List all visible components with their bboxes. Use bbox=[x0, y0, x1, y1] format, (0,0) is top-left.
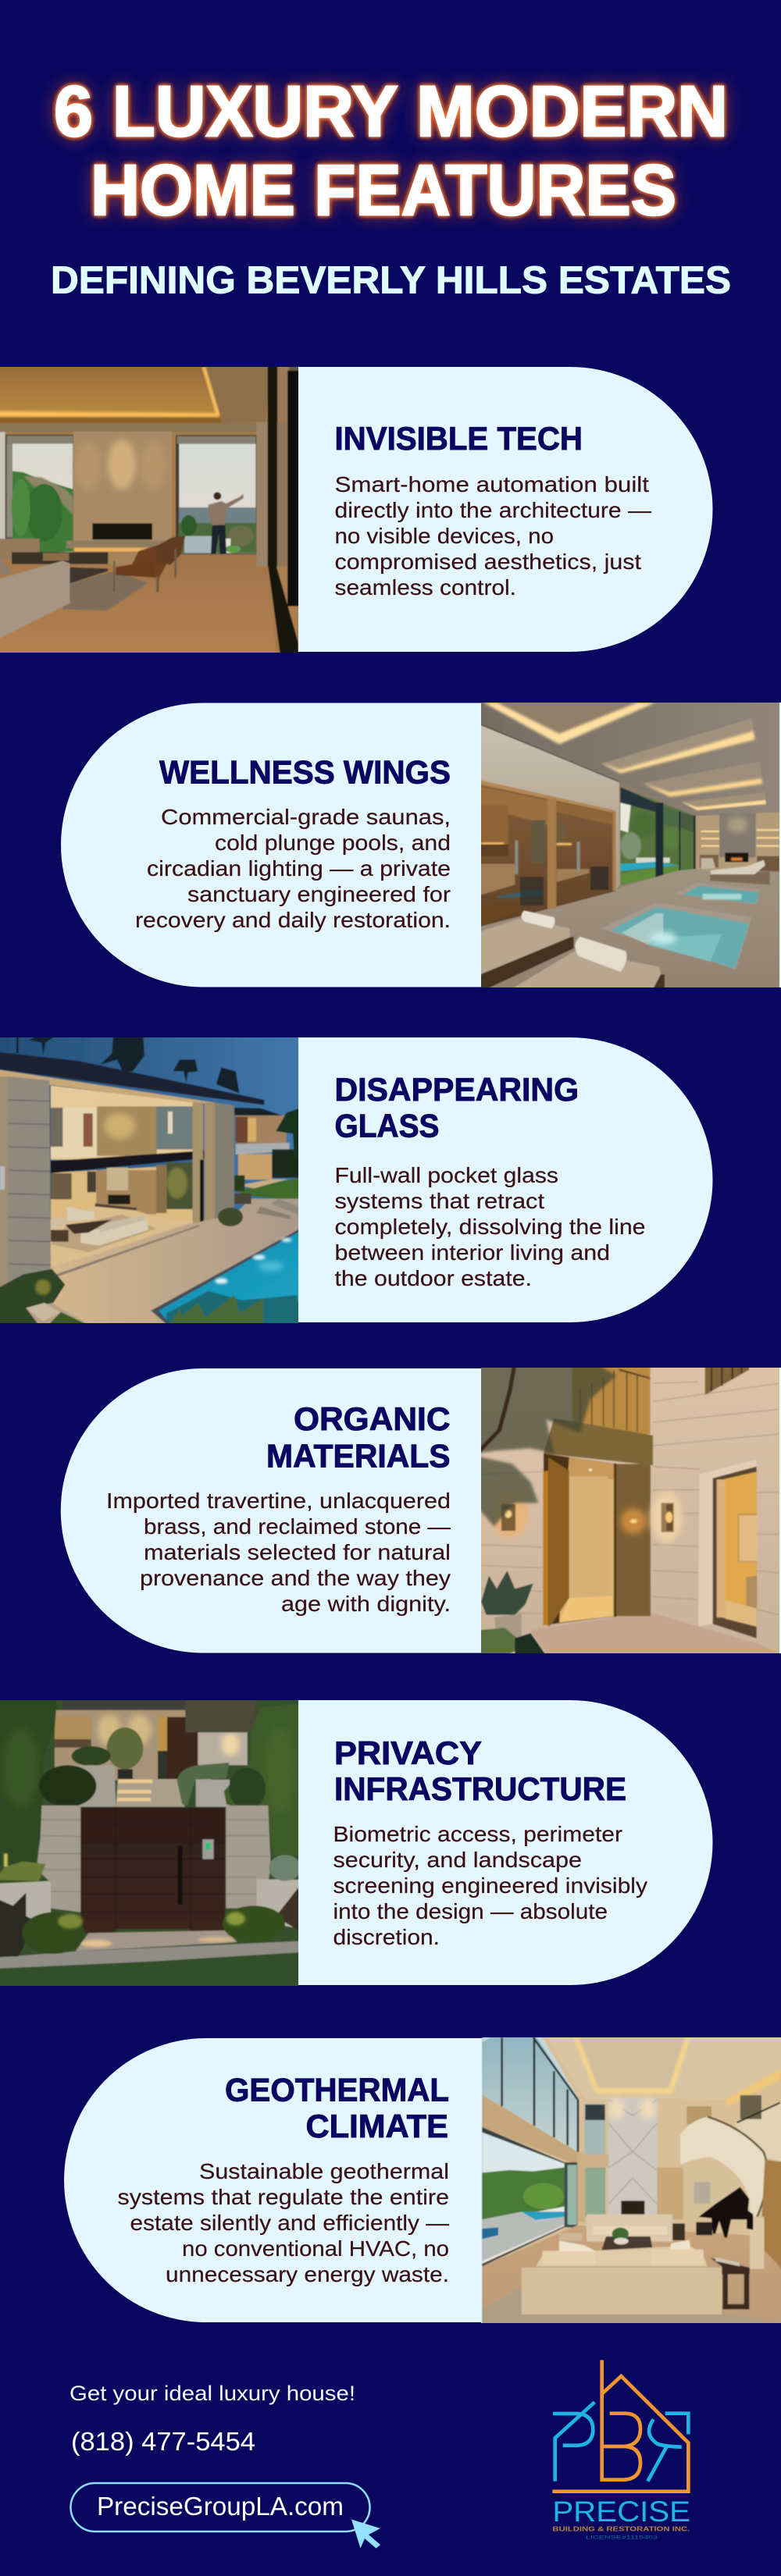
heading: PRIVACY bbox=[334, 1735, 482, 1771]
panel: geothermal climate bbox=[64, 2032, 781, 2329]
body text bbox=[135, 805, 451, 932]
body text bbox=[334, 1163, 645, 1290]
body text: directly into the architecture — bbox=[334, 498, 651, 522]
body text: Full-wall pocket glass bbox=[334, 1163, 558, 1187]
body text: circadian lighting — a private bbox=[147, 856, 451, 881]
body text: Smart-home automation built bbox=[334, 472, 649, 496]
icon: cursor arrow bbox=[351, 2520, 380, 2548]
body text: seamless control. bbox=[334, 575, 516, 600]
body text: estate silently and efficiently — bbox=[130, 2211, 449, 2235]
license number: LICENSE#1115403 bbox=[586, 2535, 658, 2540]
heading: DISAPPEARING bbox=[334, 1071, 579, 1108]
body text: Commercial-grade saunas, bbox=[161, 805, 451, 829]
pill bbox=[61, 703, 481, 987]
heading bbox=[225, 2072, 449, 2144]
photo: dusk house with pool bbox=[0, 1037, 298, 1323]
pill bbox=[298, 1700, 712, 1985]
body text: sanctuary engineered for bbox=[187, 882, 451, 906]
heading: GLASS bbox=[334, 1107, 439, 1144]
wordmark: PRECISE bbox=[552, 2495, 690, 2528]
body text bbox=[117, 2159, 449, 2286]
title bbox=[54, 72, 728, 230]
body text: unnecessary energy waste. bbox=[166, 2262, 449, 2286]
body text: recovery and daily restoration. bbox=[135, 908, 451, 932]
body text: completely, dissolving the line bbox=[334, 1215, 645, 1239]
title: 6 LUXURY MODERN bbox=[54, 72, 728, 151]
body text: cold plunge pools, and bbox=[215, 831, 451, 855]
pill bbox=[298, 1037, 712, 1322]
panel: privacy infrastructure bbox=[0, 1695, 713, 1991]
heading: CLIMATE bbox=[306, 2108, 448, 2144]
body text bbox=[106, 1489, 451, 1616]
body text bbox=[334, 472, 651, 600]
heading: GEOTHERMAL bbox=[225, 2072, 449, 2108]
photo: double-height living room with piano bbox=[481, 2037, 781, 2323]
body text: materials selected for natural bbox=[144, 1540, 451, 1564]
photo: gated entry with fingerprint keypad bbox=[0, 1700, 298, 1986]
body text: into the design — absolute bbox=[333, 1899, 608, 1923]
body text: Imported travertine, unlacquered bbox=[106, 1489, 451, 1513]
body text: no visible devices, no bbox=[334, 524, 554, 548]
footer: contact bbox=[70, 2382, 380, 2548]
logo mark: house with PBR bbox=[552, 2360, 688, 2492]
photo: spa with sauna and plunge pools bbox=[481, 703, 781, 987]
body text: Biometric access, perimeter bbox=[333, 1822, 622, 1846]
tagline: BUILDING & RESTORATION INC. bbox=[552, 2525, 690, 2533]
heading: ORGANIC bbox=[294, 1400, 450, 1437]
phone number: (818) 477-5454 bbox=[71, 2427, 255, 2456]
body text: brass, and reclaimed stone — bbox=[144, 1514, 451, 1539]
logo: Precise Building & Restoration bbox=[552, 2360, 690, 2540]
body text: between interior living and bbox=[334, 1240, 610, 1265]
subtitle: DEFINING BEVERLY HILLS ESTATES bbox=[51, 259, 731, 301]
pill bbox=[61, 1368, 481, 1653]
heading bbox=[334, 1735, 626, 1807]
panel: disappearing glass bbox=[0, 1032, 713, 1329]
website button bbox=[70, 2483, 370, 2532]
heading: INFRASTRUCTURE bbox=[334, 1770, 626, 1807]
body text: no conventional HVAC, no bbox=[182, 2236, 449, 2261]
panel: wellness wings bbox=[61, 697, 781, 994]
body text: the outdoor estate. bbox=[334, 1266, 532, 1290]
body text: systems that regulate the entire bbox=[117, 2185, 449, 2209]
heading: INVISIBLE TECH bbox=[334, 420, 583, 457]
body text: provenance and the way they bbox=[140, 1566, 451, 1590]
title: HOME FEATURES bbox=[91, 151, 676, 230]
body text: age with dignity. bbox=[281, 1592, 451, 1616]
pill bbox=[64, 2038, 483, 2322]
body text: compromised aesthetics, just bbox=[334, 550, 641, 574]
panel: organic materials bbox=[61, 1362, 781, 1659]
heading: WELLNESS WINGS bbox=[159, 754, 451, 790]
call to action: Get your ideal luxury house! bbox=[70, 2382, 355, 2405]
photo: travertine entry with brass door bbox=[481, 1368, 781, 1653]
heading bbox=[266, 1400, 450, 1474]
body text: screening engineered invisibly bbox=[333, 1873, 647, 1898]
body text: Sustainable geothermal bbox=[199, 2159, 449, 2183]
body text bbox=[333, 1822, 647, 1949]
website button: PreciseGroupLA.com bbox=[97, 2492, 344, 2521]
pill bbox=[298, 367, 712, 652]
panel: invisible tech bbox=[0, 361, 713, 658]
heading bbox=[334, 1071, 579, 1144]
heading: MATERIALS bbox=[266, 1438, 450, 1474]
body text: systems that retract bbox=[334, 1189, 544, 1213]
body text: security, and landscape bbox=[333, 1848, 582, 1872]
body text: discretion. bbox=[333, 1925, 440, 1949]
photo: living room with man at window bbox=[0, 367, 298, 653]
